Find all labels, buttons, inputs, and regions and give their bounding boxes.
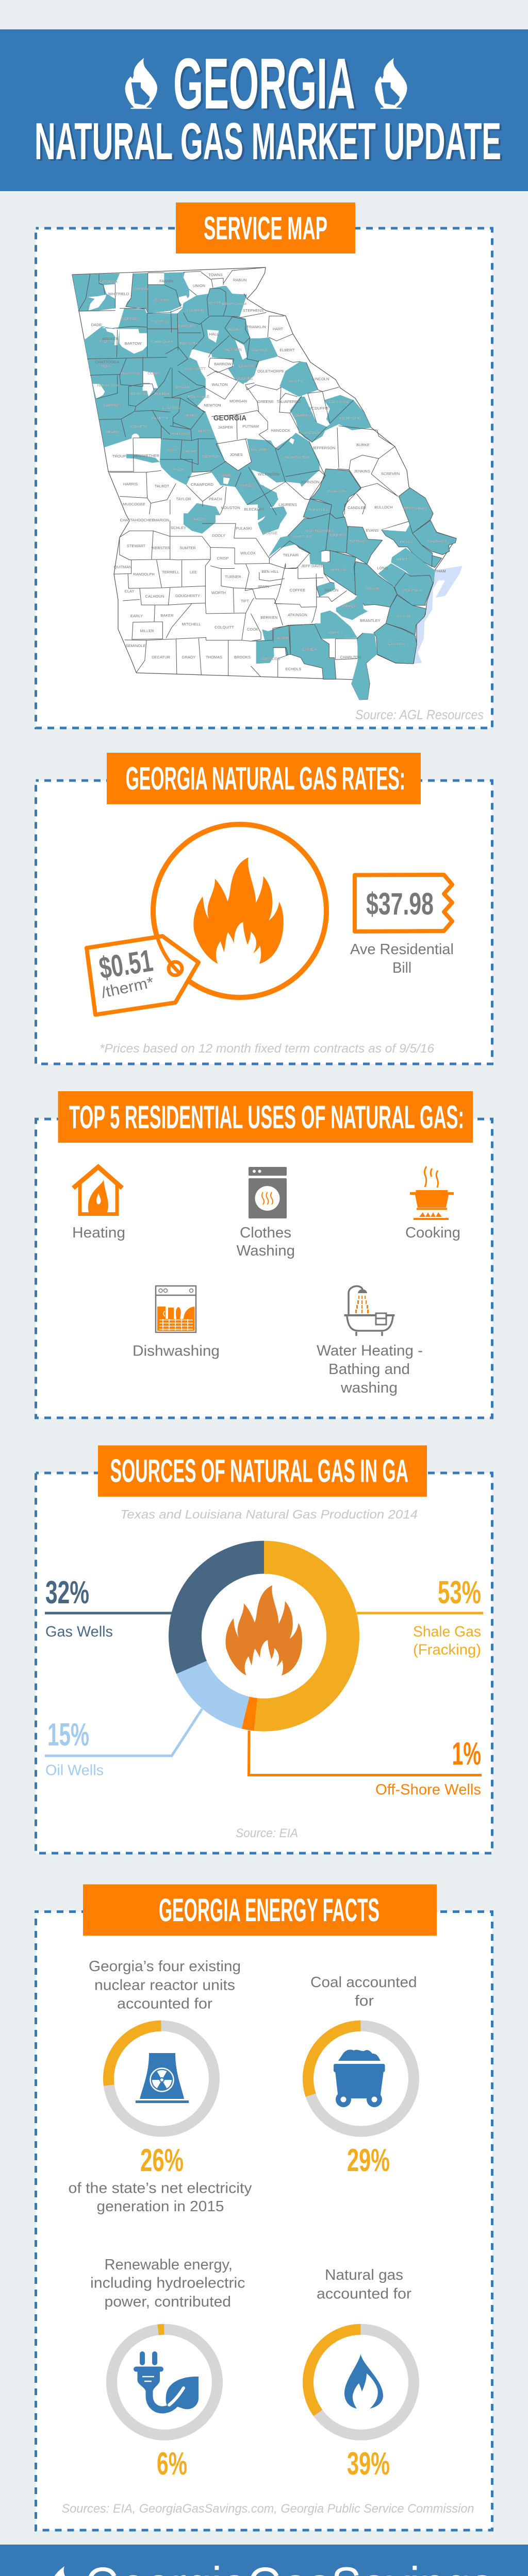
county labels: MITCHELL xyxy=(182,622,201,626)
county labels: APPLING xyxy=(331,567,347,572)
county labels: LAMAR xyxy=(183,449,197,453)
county labels: BACON xyxy=(325,588,338,592)
price tag: average bill xyxy=(355,875,452,931)
county labels: SPALDING xyxy=(170,431,189,436)
use: dishwashing xyxy=(133,1286,220,1359)
county labels: LONG xyxy=(377,566,388,570)
use: dishwashing: Dishwashing xyxy=(133,1343,220,1359)
icon: left flame xyxy=(125,58,157,109)
state fill and outline xyxy=(72,267,456,700)
county labels: DECATUR xyxy=(152,655,170,659)
source: EIA: Source: EIA xyxy=(236,1826,298,1840)
fact: nuclear 26%: of the state’s net electricity xyxy=(68,2180,252,2197)
county labels: MURRAY xyxy=(133,286,149,291)
county labels: SCHLEY xyxy=(171,526,186,530)
county labels: PEACH xyxy=(209,497,222,501)
fact: renewable 6% xyxy=(90,2257,245,2482)
price tag: per therm xyxy=(87,936,199,1015)
callout: gas wells 32%: Gas Wells xyxy=(45,1624,113,1640)
county labels: CLAY xyxy=(124,589,135,594)
fact: nuclear 26%: 26% xyxy=(140,2143,184,2178)
county labels: HEARD xyxy=(106,430,120,434)
county labels: CATOOSA xyxy=(99,279,118,284)
county labels: WORTH xyxy=(211,590,226,595)
heading: service map: SERVICE MAP xyxy=(204,210,327,246)
county labels: BULLOCH xyxy=(374,505,393,510)
callout: off-shore wells 1% xyxy=(249,1731,482,1798)
donut chart xyxy=(185,1557,343,1715)
county labels: GORDON xyxy=(121,316,139,321)
county labels: WASHINGTON xyxy=(283,455,310,460)
county labels: BRYAN xyxy=(400,539,413,544)
footnote: *Prices based on 12 month fixed term contracts as of 9/5/16 xyxy=(100,1042,435,1056)
icon: right flame xyxy=(375,58,407,109)
fact: coal 29%: for xyxy=(355,1993,374,2009)
county labels: JOHNSON xyxy=(301,480,319,484)
county labels: BIBB xyxy=(222,473,231,478)
county labels: JACKSON xyxy=(223,347,242,352)
label: average residential bill xyxy=(350,941,454,976)
use: water heating: Bathing and xyxy=(328,1361,410,1378)
county labels: HENRY xyxy=(184,413,197,418)
county labels: TIFT xyxy=(241,599,249,603)
heading: top 5 uses xyxy=(58,1091,473,1143)
price tag: average bill: $37.98 xyxy=(366,887,434,921)
white gaps north xyxy=(93,327,158,441)
county labels: CRISP xyxy=(217,556,228,561)
county labels: TALBOT xyxy=(155,484,170,488)
callout: oil wells 15%: Oil Wells xyxy=(45,1762,104,1778)
county labels: TREUTLEN xyxy=(308,507,328,512)
county labels: JASPER xyxy=(218,425,233,430)
county labels: BRANTLEY xyxy=(360,618,381,623)
county labels: JONES xyxy=(229,452,243,457)
county labels: CRAWFORD xyxy=(191,482,214,487)
county labels: DOUGLAS xyxy=(129,391,147,396)
county labels: WEBSTER xyxy=(151,546,171,550)
callout: off-shore wells 1%: Off-Shore Wells xyxy=(375,1782,481,1798)
county labels: MCINTOSH xyxy=(402,588,423,592)
county labels: FAYETTE xyxy=(152,416,169,420)
county labels: WALKER xyxy=(102,336,119,341)
coastal waters xyxy=(414,566,463,664)
county labels: TAYLOR xyxy=(176,497,191,501)
county labels: GWINNETT xyxy=(185,366,206,371)
county labels: CHARLTON xyxy=(340,655,361,659)
use: heating xyxy=(72,1167,125,1241)
county labels: BURKE xyxy=(356,443,370,447)
county labels: FANNIN xyxy=(159,279,174,283)
county labels: POLK xyxy=(101,364,111,368)
map label: Georgia: GEORGIA xyxy=(213,414,246,422)
county labels: FORSYTH xyxy=(179,341,198,346)
county labels: TELFAIR xyxy=(283,553,299,557)
county labels: DEKALB xyxy=(175,385,190,389)
county labels: MILLER xyxy=(140,629,154,633)
county labels: PIERCE xyxy=(342,604,356,608)
fact: coal 29% xyxy=(308,1974,417,2178)
county labels: STEPHENS xyxy=(243,308,263,313)
use: water heating xyxy=(317,1286,423,1396)
county labels: DADE xyxy=(91,323,102,327)
county labels: CARROLL xyxy=(103,403,122,408)
county labels: HABERSHAM xyxy=(222,301,246,306)
county labels: COBB xyxy=(147,371,159,376)
fact: natural gas 39%: accounted for xyxy=(317,2285,411,2302)
county labels: WARREN xyxy=(294,413,311,418)
county labels: QUITMAN xyxy=(114,565,131,569)
county labels: BROOKS xyxy=(234,655,251,659)
county labels: SUMTER xyxy=(179,546,196,550)
county labels: FLOYD xyxy=(99,339,112,344)
header band xyxy=(0,29,528,191)
county labels: SCREVEN xyxy=(381,471,400,476)
fact: nuclear 26% xyxy=(68,1958,252,2215)
county labels: HART xyxy=(273,327,284,331)
county labels: WAYNE xyxy=(366,586,380,591)
county lines south west xyxy=(114,521,363,677)
county labels: FRANKLIN xyxy=(246,325,266,329)
fact: nuclear 26%: accounted for xyxy=(117,1996,212,2012)
fact: renewable 6%: including hydroelectric xyxy=(90,2275,245,2292)
county labels: MONTGOMERY xyxy=(305,529,334,533)
county labels: PICKENS xyxy=(152,319,168,324)
county labels: COWETA xyxy=(130,424,147,429)
county labels: CANDLER xyxy=(348,505,367,510)
county labels: FULTON xyxy=(154,392,170,396)
county labels xyxy=(91,273,446,671)
county labels: BEN HILL xyxy=(261,569,279,574)
county labels: COFFEE xyxy=(290,588,305,592)
county labels: MERIWETHER xyxy=(133,453,159,458)
fact: natural gas 39%: Natural gas xyxy=(325,2267,403,2283)
county labels: LANIER xyxy=(274,636,289,640)
use: cooking: Cooking xyxy=(405,1225,460,1241)
county labels: TURNER xyxy=(225,574,241,579)
panel: sources of natural gas xyxy=(36,1446,492,1853)
source: AGL Resources: Source: AGL Resources xyxy=(355,707,484,722)
county labels: RABUN xyxy=(233,278,246,282)
county labels: HALL xyxy=(209,332,219,336)
county labels: COOK xyxy=(247,627,258,632)
county labels: EFFINGHAM xyxy=(404,506,426,511)
panel: service map xyxy=(36,202,492,728)
county labels: TOOMBS xyxy=(329,533,345,537)
callout: gas wells 32%: 32% xyxy=(45,1575,89,1611)
county labels: BERRIEN xyxy=(260,615,278,620)
county labels: UPSON xyxy=(171,467,185,472)
fact: coal 29%: 29% xyxy=(347,2143,390,2178)
county labels: LIBERTY xyxy=(394,557,410,562)
map: Georgia county service territory xyxy=(72,267,463,700)
label: average residential bill: Bill xyxy=(392,960,411,976)
county labels: WHITE xyxy=(209,300,221,305)
county labels: PIKE xyxy=(167,448,176,452)
county labels: LEE xyxy=(190,570,197,574)
county labels: DODGE xyxy=(263,531,277,535)
subtitle: Texas and Louisiana Natural Gas Production 2014 xyxy=(120,1507,418,1522)
county labels: BANKS xyxy=(228,327,242,332)
callout: oil wells 15%: 15% xyxy=(47,1717,89,1753)
county labels: LUMPKIN xyxy=(187,308,204,313)
fact: nuclear 26%: nuclear reactor units xyxy=(94,1977,235,1994)
county labels: CHATTAHOOCHEE xyxy=(120,518,154,522)
callout: shale gas 53% xyxy=(357,1575,483,1658)
county labels: CLARKE xyxy=(239,364,254,368)
county labels: WARE xyxy=(328,630,340,635)
county labels: BUTTS xyxy=(199,429,211,433)
county labels: WILCOX xyxy=(240,551,256,555)
county labels: BARROW xyxy=(214,362,232,366)
county labels: SEMINOLE xyxy=(126,643,145,648)
county labels: BLECKLEY xyxy=(244,507,264,512)
county labels: MUSCOGEE xyxy=(123,502,145,506)
sources note: Sources: EIA, GeorgiaGasSavings.com, Georgia Public Service Commission xyxy=(62,2502,474,2516)
county labels: CHATTOOGA xyxy=(95,360,119,364)
county labels: HANCOCK xyxy=(271,428,290,433)
county labels: EARLY xyxy=(130,614,143,618)
county labels: PAULDING xyxy=(121,371,140,376)
county labels: MCDUFFIE xyxy=(309,406,328,411)
county labels: WHEELER xyxy=(292,534,312,539)
county labels: WHITFIELD xyxy=(108,292,129,296)
title: Georgia: GEORGIA xyxy=(173,43,355,124)
county labels: DAWSON xyxy=(178,324,195,328)
panel: Georgia natural gas rates xyxy=(36,753,492,1064)
use: water heating: washing xyxy=(340,1380,398,1396)
county labels: IRWIN xyxy=(258,584,269,589)
county labels: ECHOLS xyxy=(286,667,301,671)
county labels: GILMER xyxy=(155,298,170,302)
teal service areas north xyxy=(72,272,371,515)
county labels: ELBERT xyxy=(279,348,295,352)
county labels: MARION xyxy=(154,518,169,522)
price tag: per therm: /therm* xyxy=(100,974,156,1002)
county labels: UNION xyxy=(193,283,205,288)
callout: gas wells 32% xyxy=(45,1575,172,1640)
county labels: HARALSON xyxy=(97,383,119,387)
county labels: GREENE xyxy=(257,399,274,404)
county labels: JEFF DAVIS xyxy=(301,564,323,568)
county labels: TROUP xyxy=(112,454,126,459)
county labels: MACON xyxy=(191,517,206,521)
county labels: RANDOLPH xyxy=(133,572,155,577)
fact: nuclear 26%: Georgia’s four existing xyxy=(89,1958,241,1975)
county labels: THOMAS xyxy=(206,655,222,659)
heading: sources xyxy=(98,1446,427,1497)
county labels: LAURENS xyxy=(278,502,297,507)
county labels: COLQUITT xyxy=(214,625,234,630)
county labels: CAMDEN xyxy=(388,641,405,646)
county labels: HOUSTON xyxy=(221,505,240,510)
county labels: TOWNS xyxy=(208,273,223,277)
logo flame xyxy=(42,2566,80,2576)
use: clothes washing: Washing xyxy=(236,1243,295,1259)
county labels: ATKINSON xyxy=(288,613,307,617)
county labels: WILKINSON xyxy=(258,472,279,477)
county labels: OGLETHORPE xyxy=(257,369,284,374)
county labels: CLINCH xyxy=(302,647,317,652)
use: water heating: Water Heating - xyxy=(317,1343,423,1359)
price tag: per therm: $0.51 xyxy=(97,943,155,986)
heading: service map xyxy=(176,202,355,253)
county labels: COLUMBIA xyxy=(328,399,349,404)
fact: renewable 6%: 6% xyxy=(157,2446,187,2482)
callout: shale gas 53%: 53% xyxy=(438,1575,481,1611)
county labels: HARRIS xyxy=(123,482,138,486)
fact: coal 29%: Coal accounted xyxy=(310,1974,417,1991)
county labels: GRADY xyxy=(182,655,195,659)
county labels: DOOLY xyxy=(212,533,225,538)
heading: rates xyxy=(107,753,421,804)
county labels: DOUGHERTY xyxy=(175,594,200,598)
county labels: CLAYTON xyxy=(162,405,180,410)
callout: shale gas 53%: Shale Gas xyxy=(413,1624,481,1640)
fact: natural gas 39%: 39% xyxy=(347,2446,390,2482)
county labels: TWIGGS xyxy=(238,483,254,488)
use: cooking xyxy=(405,1166,460,1241)
fact: renewable 6%: power, contributed xyxy=(104,2294,231,2310)
use: heating: Heating xyxy=(72,1225,125,1241)
county labels: OCONEE xyxy=(236,376,253,381)
fact: renewable 6%: Renewable energy, xyxy=(104,2257,233,2273)
heading: energy facts xyxy=(83,1885,437,1936)
county labels: TERRELL xyxy=(162,570,179,574)
panel: top 5 residential uses xyxy=(36,1091,492,1418)
county labels: GLYNN xyxy=(397,614,410,618)
county labels: STEWART xyxy=(127,544,146,548)
panel: Georgia energy facts xyxy=(36,1885,492,2530)
icon: flame in circle xyxy=(153,824,326,997)
county labels: ROCKDALE xyxy=(188,394,209,399)
county labels: BARTOW xyxy=(125,341,142,346)
callout: oil wells 15% xyxy=(45,1709,202,1778)
county labels: NEWTON xyxy=(204,403,221,408)
county labels: MADISON xyxy=(251,348,269,352)
county labels: WILKES xyxy=(288,379,303,383)
teal service areas south east xyxy=(256,469,456,700)
county labels: RICHMOND xyxy=(339,416,361,420)
county labels: LOWNDES xyxy=(260,656,280,661)
county labels: CHATHAM xyxy=(427,539,446,544)
county labels: BAKER xyxy=(160,613,174,618)
use: clothes washing xyxy=(236,1167,295,1259)
county labels: CHEROKEE xyxy=(152,340,173,344)
fact: natural gas 39% xyxy=(308,2267,414,2482)
county labels: CALHOUN xyxy=(145,594,164,599)
county labels: TALIAFERRO xyxy=(277,399,301,404)
county lines north xyxy=(78,267,398,515)
county labels: PULASKI xyxy=(236,526,252,531)
county labels: BALDWIN xyxy=(251,447,269,452)
county labels: JEFFERSON xyxy=(312,446,335,450)
county labels: TATTNALL xyxy=(349,539,368,544)
Macon county xyxy=(184,513,216,534)
county labels: WALTON xyxy=(211,382,228,387)
label: average residential bill: Ave Residential xyxy=(350,941,454,958)
fact: nuclear 26%: generation in 2015 xyxy=(97,2198,224,2215)
use: clothes washing: Clothes xyxy=(240,1225,291,1241)
county labels: MONROE xyxy=(202,454,219,459)
county labels: PUTNAM xyxy=(242,424,259,429)
county labels: GLASCOCK xyxy=(299,430,320,435)
county labels: EMANUEL xyxy=(328,489,346,494)
callout: off-shore wells 1%: 1% xyxy=(452,1736,481,1772)
county labels: THAM xyxy=(435,569,446,573)
county labels: LINCOLN xyxy=(312,377,329,381)
footer band xyxy=(0,2545,528,2576)
county labels: JENKINS xyxy=(354,469,370,473)
callout: shale gas 53%: (Fracking) xyxy=(413,1641,481,1658)
county labels: EVANS xyxy=(366,528,378,533)
county labels: MORGAN xyxy=(229,399,247,403)
